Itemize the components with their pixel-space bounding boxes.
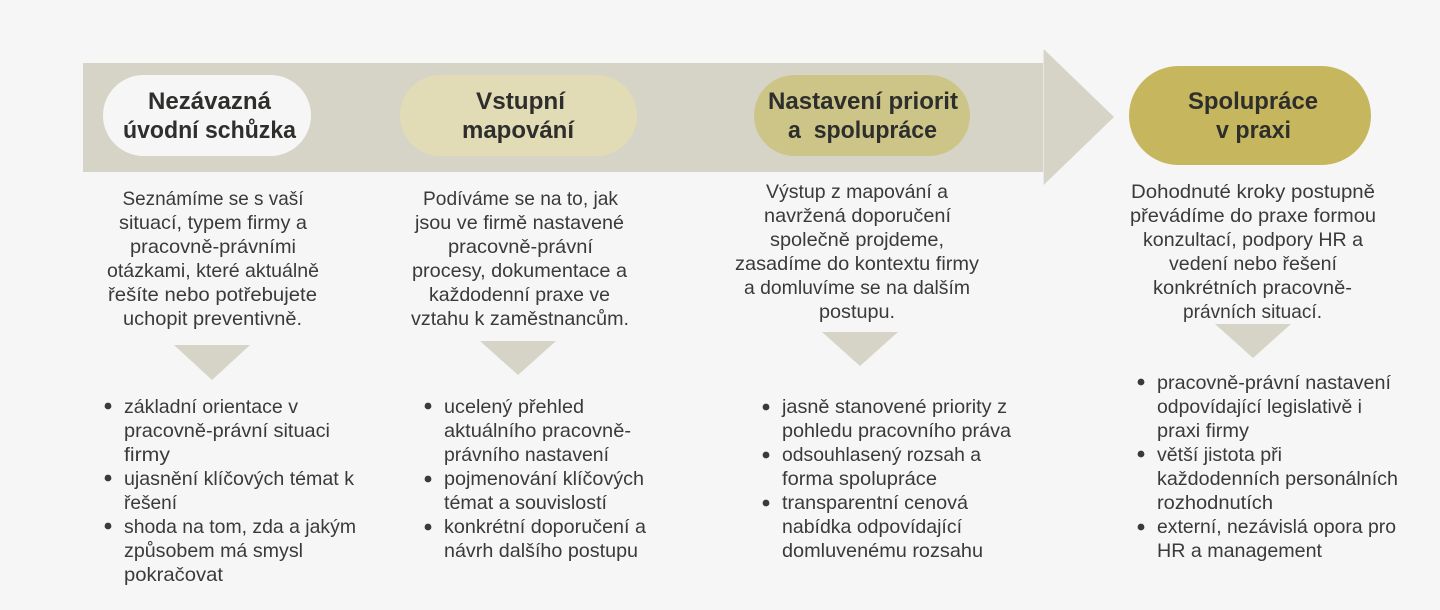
description: step 3: a domluvíme se na dalším [744, 277, 970, 299]
description: step 2: pracovně-právní [448, 236, 594, 258]
bullet list: step 1: základní orientace v [124, 396, 298, 418]
bullet list: step 2: právního nastavení [444, 444, 610, 466]
panel: step 1 [103, 75, 356, 586]
heading: step 3: a spolupráce [788, 117, 937, 144]
bullet list: step 4: každodenních personálních [1157, 468, 1398, 490]
heading: step 2: mapování [462, 117, 575, 144]
description: step 1: otázkami, které aktuálně [107, 260, 319, 282]
description: step 4 [1130, 181, 1376, 323]
heading: step 4 [1188, 88, 1318, 144]
bullet list: step 2: návrh dalšího postupu [444, 540, 638, 562]
description: step 2: Podíváme se na to, jak [423, 188, 618, 210]
panel: step 2 [400, 75, 646, 562]
bullet list: step 1: řešení [124, 492, 178, 514]
description: step 2: vztahu k zaměstnancům. [411, 308, 629, 330]
arrow: step 2 down [480, 341, 556, 375]
heading: step 4: v praxi [1216, 117, 1291, 144]
process arrow [83, 49, 1114, 185]
description: step 2: každodenní praxe ve [429, 284, 610, 306]
description: step 4: převádíme do praxe formou [1130, 205, 1376, 227]
description: step 2: procesy, dokumentace a [412, 260, 627, 282]
description: step 4: vedení nebo řešení [1169, 253, 1338, 275]
description: step 3: Výstup z mapování a [766, 181, 948, 203]
bullet list: step 1: způsobem má smysl [124, 540, 303, 562]
heading: step 4: Spolupráce [1188, 88, 1318, 115]
description: step 3: postupu. [819, 301, 895, 323]
bullet list: step 4: rozhodnutích [1157, 492, 1273, 514]
description: step 4: konkrétních pracovně- [1153, 277, 1352, 299]
bullet list: step 1: shoda na tom, zda a jakým [124, 516, 356, 538]
pill: step 3 [754, 75, 970, 156]
description: step 2: jsou ve firmě nastavené [414, 212, 624, 234]
bullet list: step 4: HR a management [1157, 540, 1323, 562]
pill: step 2 [400, 75, 637, 156]
heading: step 3 [768, 88, 958, 144]
bullet list: step 4: větší jistota při [1157, 444, 1282, 466]
bullet list: step 4: odpovídající legislativě i [1157, 396, 1362, 418]
bullet list: step 2: aktuálního pracovně- [444, 420, 631, 442]
heading: step 1: Nezávazná [148, 88, 272, 115]
bullet list: step 3: transparentní cenová [782, 492, 968, 514]
description: step 3: navržená doporučení [764, 205, 952, 227]
description: step 4: konzultací, podpory HR a [1143, 229, 1363, 251]
bullet list: step 1: pracovně-právní situaci [124, 420, 330, 442]
bullet list: step 4: praxi firmy [1157, 420, 1249, 442]
heading: step 2: Vstupní [476, 88, 566, 115]
bullet list: step 3: nabídka odpovídající [782, 516, 963, 538]
description: step 1: řešíte nebo potřebujete [108, 284, 317, 306]
description: step 1: pracovně-právními [130, 236, 296, 258]
bullet list: step 4 [1138, 372, 1398, 562]
pill: step 4 [1129, 66, 1371, 165]
description: step 3 [735, 181, 979, 323]
bullet list: step 2: témat a souvislostí [444, 492, 608, 514]
bullet list: step 3 [763, 396, 1011, 562]
bullet list: step 4: externí, nezávislá opora pro [1157, 516, 1396, 538]
bullet list: step 2 [425, 396, 646, 562]
panel: step 4 [1129, 66, 1398, 562]
description: step 2 [411, 188, 629, 330]
description: step 3: společně projdeme, [770, 229, 944, 251]
heading: step 1: úvodní schůzka [123, 117, 297, 144]
bullet list: step 1: firmy [124, 444, 170, 466]
bullet list: step 1: ujasnění klíčových témat k [124, 468, 354, 490]
bullet list: step 3: domluvenému rozsahu [782, 540, 983, 562]
bullet list: step 2: pojmenování klíčových [444, 468, 644, 490]
description: step 3: zasadíme do kontextu firmy [735, 253, 979, 275]
bullet list: step 1 [105, 396, 356, 586]
description: step 1: uchopit preventivně. [123, 308, 302, 330]
bullet list: step 4: pracovně-právní nastavení [1157, 372, 1392, 394]
heading: step 1 [123, 88, 297, 144]
bullet list: step 3: forma spolupráce [782, 468, 937, 490]
description: step 4: Dohodnuté kroky postupně [1131, 181, 1375, 203]
arrow: step 1 down [174, 345, 250, 380]
heading: step 3: Nastavení priorit [768, 88, 958, 115]
arrow: step 4 down [1215, 324, 1291, 358]
pill: step 1 [103, 75, 311, 156]
heading: step 2 [462, 88, 575, 144]
bullet list: step 3: pohledu pracovního práva [782, 420, 1011, 442]
bullet list: step 2: ucelený přehled [444, 396, 584, 418]
bullet list: step 3: odsouhlasený rozsah a [782, 444, 981, 466]
bullet list: step 3: jasně stanovené priority z [781, 396, 1007, 418]
arrow: step 3 down [822, 332, 898, 366]
bullet list: step 1: pokračovat [124, 564, 224, 586]
panel: step 3 [735, 75, 1011, 562]
description: step 1: situací, typem firmy a [119, 212, 307, 234]
bullet list: step 2: konkrétní doporučení a [444, 516, 646, 538]
description: step 4: právních situací. [1183, 301, 1322, 323]
description: step 1: Seznámíme se s vaší [122, 188, 304, 210]
description: step 1 [107, 188, 319, 330]
